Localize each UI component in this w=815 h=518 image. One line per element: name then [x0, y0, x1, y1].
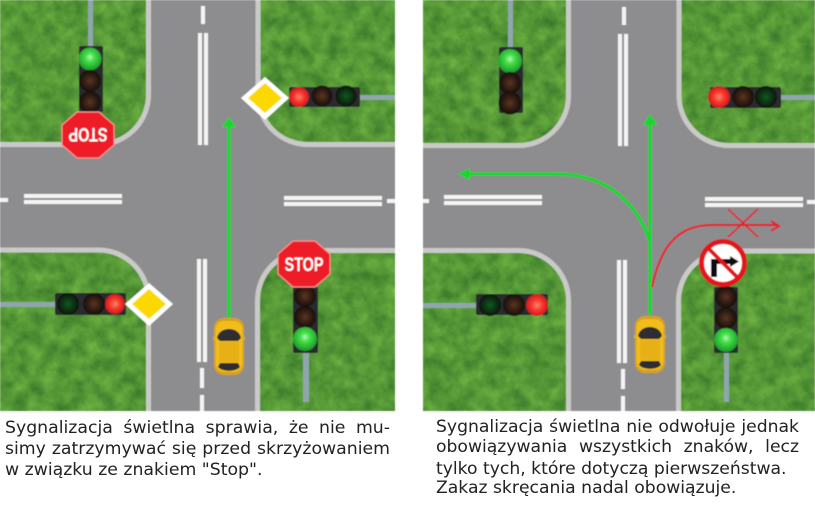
traffic light: top, green [498, 0, 523, 114]
stop sign [278, 241, 330, 287]
road surface [423, 0, 815, 411]
grass: top-left corner [418, 0, 568, 146]
grass: bottom-left corner [418, 250, 568, 416]
traffic light: left, red [0, 293, 126, 315]
road surface [0, 0, 395, 411]
text block: right caption: Sygnalizacja świetlna nie odwołuje jednak [436, 417, 799, 437]
arrow: straight ahead [643, 114, 657, 315]
text block: right caption: Zakaz skręcania nadal obowiązuje. [436, 478, 736, 498]
grass: bottom-right corner [258, 250, 400, 416]
no right turn sign [702, 242, 744, 284]
car: yellow [634, 316, 666, 373]
priority road sign: top [241, 77, 289, 120]
stop sign: upside down [62, 112, 114, 158]
grass: top-right corner [258, 0, 400, 144]
text block: right caption: tylko tych, które dotyczą pierwszeństwa. [436, 459, 786, 479]
arrow: forbidden right turn [652, 221, 779, 287]
traffic light: top, green [78, 0, 103, 113]
text block: right caption [436, 417, 799, 498]
text block: right caption: obowiązywania wszystkich znaków, lecz [436, 437, 799, 457]
panel: left intersection [0, 0, 400, 416]
traffic light: right, red [708, 86, 815, 108]
text block: left caption: w związku ze znakiem "Stop". [5, 460, 262, 480]
car: yellow [213, 318, 245, 375]
traffic light: bottom, green [293, 285, 318, 402]
grass: bottom-left corner [0, 250, 148, 416]
traffic light: left, red [423, 294, 548, 316]
intersection illustrations [0, 0, 815, 412]
text block: left caption [5, 418, 390, 480]
traffic light: right, red [289, 86, 395, 107]
traffic light: bottom, green [714, 286, 738, 402]
road markings [423, 7, 815, 411]
stop sign: upside down: STOP [68, 123, 108, 144]
road markings [0, 6, 395, 411]
stop sign: STOP [284, 255, 324, 276]
text block: left caption: simy zatrzymywać się przed skrzyżowaniem [5, 439, 390, 459]
cross mark [728, 209, 758, 237]
grass: top-left corner [0, 0, 148, 144]
text block: left caption: Sygnalizacja świetlna sprawia, że nie mu- [5, 418, 390, 438]
priority road sign: bottom [125, 283, 173, 326]
arrow: left turn [458, 168, 650, 242]
grass: bottom-right corner [678, 251, 815, 416]
grass: top-right corner [679, 0, 815, 146]
panel: right intersection [418, 0, 815, 416]
arrow: straight ahead [222, 117, 236, 319]
